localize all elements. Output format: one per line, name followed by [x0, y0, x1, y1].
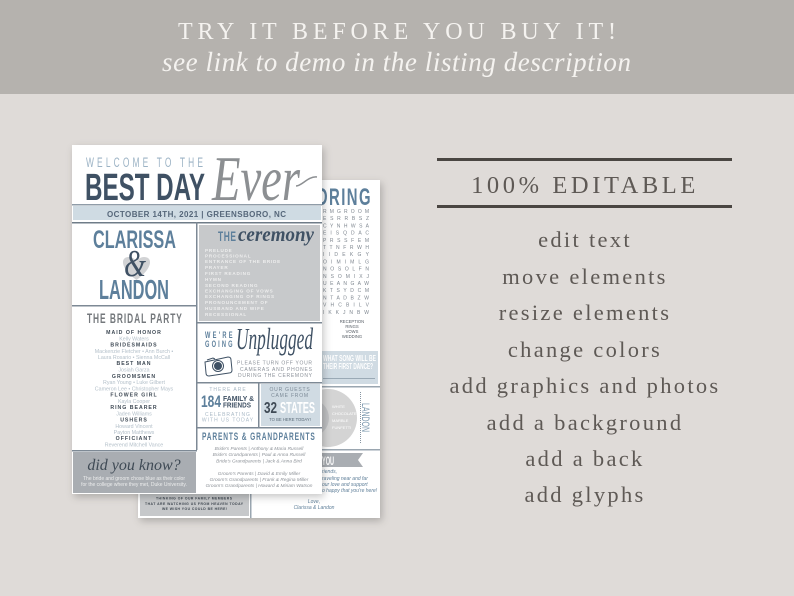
banner heading: TRY IT BEFORE YOU BUY IT!: [178, 19, 616, 45]
parents and grandparents: Groom's Grandparents | Frank & Regina Miller: [210, 477, 309, 483]
song question box: THEIR FIRST DANCE?: [323, 362, 373, 371]
panel: back page: [138, 180, 380, 518]
guest count: [201, 387, 254, 424]
thank you message: Clarissa & Landon: [294, 505, 335, 511]
parents and grandparents: Bride's Parents | Anthony & Maria Russell: [215, 446, 304, 452]
feature list: [450, 227, 720, 507]
feature list: change colors: [508, 337, 662, 362]
heart: [123, 257, 150, 280]
cake flavour circle: WHITE: [332, 404, 345, 409]
bridal party: Kayla Cooper: [118, 399, 150, 405]
word search grid: E I S Q D A C: [323, 231, 369, 237]
parents and grandparents: Bride's Grandparents | Jack & Anna Bird: [216, 458, 302, 464]
cake flavour circle: FUNFETTI: [332, 425, 351, 430]
word search grid: N S O M I X J: [323, 274, 370, 280]
song question box: WHAT SONG WILL BE: [323, 354, 376, 363]
word search grid: U E A N G A W: [323, 281, 369, 287]
ceremony panel: FIRST READING: [205, 271, 251, 276]
guest count: WITH US TODAY: [202, 418, 254, 424]
did you know box: for the college where they met, Duke University.: [81, 482, 187, 488]
word list: WEDDING: [342, 334, 362, 339]
memorial box: THAT ARE WATCHING US FROM HEAVEN TODAY: [145, 502, 244, 506]
word search grid: E S R R B S Z: [323, 216, 369, 222]
guest states box: 32: [264, 400, 277, 417]
bridal party: GROOMSMEN: [112, 374, 156, 380]
title: welcome: WELCOME TO THE: [86, 156, 203, 171]
cake flavour circle: MARBLE: [332, 418, 349, 423]
guest states box: OUR GUESTS: [269, 387, 311, 393]
bridal party: THE BRIDAL PARTY: [87, 312, 182, 327]
word search grid: K T S Y D C M: [323, 288, 369, 294]
ceremony panel: PRONOUNCEMENT OF: [205, 300, 268, 305]
guest states box: TO BE HERE TODAY!: [269, 417, 311, 422]
bridal party: Laura Rosario • Sienna McCall: [98, 355, 170, 361]
date band: [73, 206, 321, 220]
feature list: add graphics and photos: [450, 373, 720, 398]
bridal party: MAID OF HONOR: [106, 330, 162, 336]
bridal party: USHERS: [120, 418, 148, 424]
word list: RINGS: [345, 324, 359, 329]
word search grid: P R S S F E M: [323, 238, 369, 244]
ribbon: YOU: [322, 454, 334, 468]
guest count: FRIENDS: [223, 402, 251, 410]
did you know box: did you know?: [87, 457, 181, 474]
bridal party: Cameron Lee • Christopher Mays: [95, 386, 174, 392]
guest states box: CAME FROM: [271, 393, 309, 399]
ceremony panel: SECOND READING: [205, 283, 258, 288]
ceremony panel: HUSBAND AND WIFE: [205, 306, 265, 311]
thank you message: [294, 469, 378, 511]
word search grid: C Y N H W S A: [323, 223, 370, 229]
did you know box: The bride and groom chose blue as their color: [83, 476, 185, 482]
unplugged section: CAMERAS AND PHONES: [240, 367, 313, 373]
feature list: add glyphs: [524, 482, 646, 507]
ceremony panel: RECESSIONAL: [205, 312, 247, 317]
word list: RECEPTION: [340, 319, 364, 324]
guest count: THERE ARE: [209, 387, 247, 393]
ceremony panel: EXCHANGING OF VOWS: [205, 288, 274, 294]
parents and grandparents: Bride's Grandparents | Paul & Anna Russell: [213, 452, 306, 458]
ceremony panel: THE: [218, 230, 236, 245]
memorial box: WE WISH YOU COULD BE HERE!: [162, 507, 227, 511]
vertical name: Landon: LANDON: [359, 403, 371, 432]
guest states box: STATES: [280, 400, 315, 417]
word search heading: ORING: [316, 185, 371, 211]
parents and grandparents: PARENTS & GRANDPARENTS: [202, 430, 315, 442]
cake flavour circle: CHOCOLATE: [332, 411, 357, 416]
unplugged section: Unplugged: [236, 321, 313, 356]
word search grid: I I D E K G Y: [323, 252, 370, 258]
bridal party: Jaden Williams: [116, 412, 152, 418]
icon: camera: [205, 357, 232, 376]
unplugged section: [205, 321, 313, 379]
bridal party: Mackenzie Fletcher • Ann Burch •: [95, 349, 173, 355]
unplugged section: PLEASE TURN OFF YOUR: [237, 360, 312, 366]
couple names: &: [124, 243, 146, 285]
ribbon: [322, 453, 363, 468]
song question box: [322, 351, 378, 384]
parents and grandparents: [202, 430, 315, 489]
feature list: resize elements: [499, 300, 671, 325]
unplugged section: DURING THE CEREMONY: [238, 373, 313, 379]
parents and grandparents: Groom's Parents | David & Emily Miller: [218, 471, 301, 477]
did you know box: [73, 452, 196, 493]
memorial box: THINKING OF OUR FAMILY MEMBERS: [156, 496, 233, 500]
thank you message: Love,: [308, 499, 320, 505]
word search grid: N T A D B Z W: [323, 295, 369, 301]
thank you message: riends,: [322, 469, 337, 475]
panel: front page: [72, 143, 322, 494]
bridal party: [87, 312, 182, 448]
feature list: edit text: [538, 227, 632, 252]
bridal party: OFFICIANT: [116, 436, 152, 442]
ceremony panel: PROCESSIONAL: [205, 254, 251, 258]
bridal party: FLOWER GIRL: [110, 392, 158, 398]
title: best day: BEST DAY: [85, 167, 205, 209]
ceremony panel: ceremony: [238, 222, 315, 246]
guest states box: [261, 384, 320, 426]
bridal party: BEST MAN: [116, 361, 152, 367]
ceremony panel: ENTRANCE OF THE BRIDE: [205, 259, 281, 264]
word search grid: T T N F R W H: [323, 245, 369, 251]
word search grid: R M G R O O M: [323, 209, 369, 215]
ceremony panel: PRELUDE: [205, 248, 233, 253]
word search grid: V H C B I L V: [323, 303, 370, 309]
top banner: [0, 0, 794, 94]
unplugged section: WE'RE: [205, 330, 233, 340]
title: ever script: Ever: [211, 143, 301, 214]
parents and grandparents: Groom's Grandparents | Howard & Miriam Watson: [206, 483, 313, 489]
word search grid: N O S O L F N: [323, 267, 369, 273]
editable heading: 100% EDITABLE: [471, 172, 699, 199]
bridal party: Payton Matthews: [114, 430, 155, 436]
couple names: CLARISSA: [93, 226, 176, 254]
date band: OCTOBER 14TH, 2021 | GREENSBORO, NC: [107, 210, 286, 219]
bridal party: Ryan Young • Luke Gilbert: [103, 380, 165, 386]
cake flavour circle: [291, 389, 357, 447]
banner subheading: see link to demo in the listing description: [162, 47, 631, 77]
couple names: [93, 226, 176, 305]
couple names: LANDON: [99, 274, 169, 305]
feature list: add a back: [525, 446, 645, 471]
bridal party: Reverend Mitchell Vance: [105, 442, 163, 448]
bridal party: RING BEARER: [110, 405, 158, 411]
dotted divider: [360, 392, 362, 443]
thank you message: our love and support: [322, 482, 368, 488]
thank you message: raveling near and far: [322, 476, 368, 482]
guest count: FAMILY &: [223, 396, 254, 403]
word search grid: [323, 209, 370, 316]
word list: VOWS: [346, 329, 359, 334]
ceremony panel: EXCHANGING OF RINGS: [205, 294, 275, 299]
thank you message: o happy that you're here!: [322, 488, 378, 494]
memorial box: [140, 494, 249, 516]
ceremony panel: PRAYER: [205, 265, 229, 270]
guest count: 184: [201, 393, 222, 411]
unplugged section: GOING: [205, 339, 233, 349]
feature list: move elements: [502, 264, 668, 289]
ceremony panel: [199, 222, 320, 321]
ceremony panel: HYMN: [205, 277, 222, 282]
feature list: add a background: [487, 410, 683, 435]
bridal party: Howard Vincent: [115, 424, 153, 430]
bridal party: Kelly Waters: [119, 336, 149, 342]
bridal party: Josiah Garza: [118, 368, 150, 374]
word list: [340, 319, 364, 339]
guest count: CELEBRATING: [205, 412, 251, 418]
word search grid: I K K J N B W: [323, 310, 369, 316]
bridal party: BRIDESMAIDS: [110, 342, 158, 348]
panel: editable features: [437, 158, 732, 507]
word search grid: O I M I M L G: [323, 259, 369, 265]
